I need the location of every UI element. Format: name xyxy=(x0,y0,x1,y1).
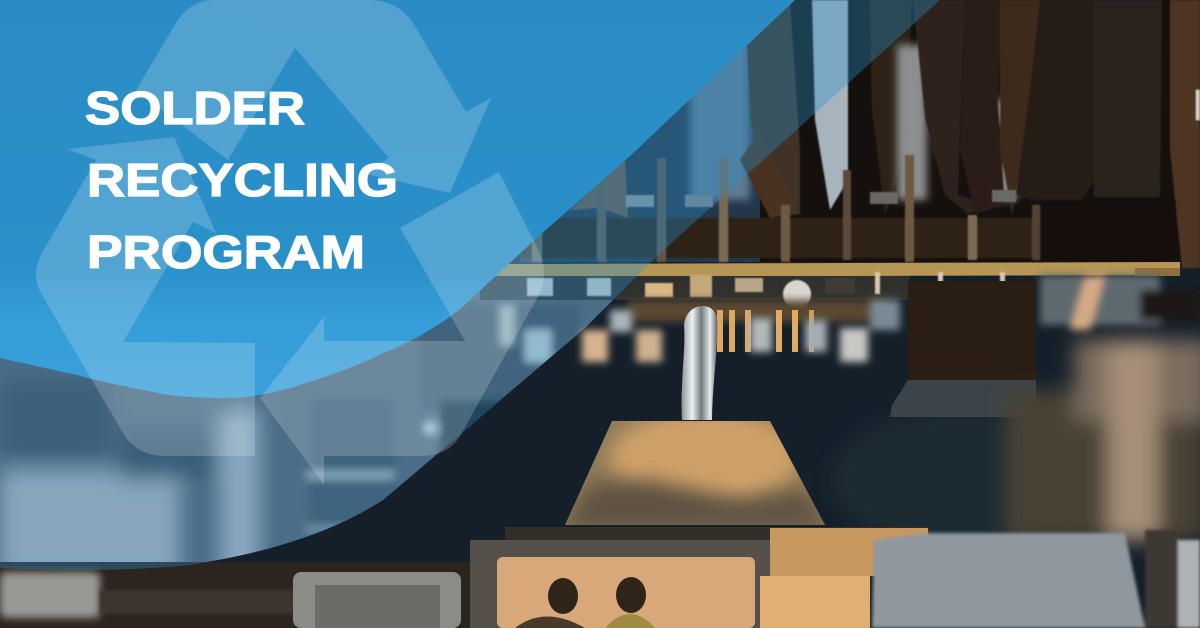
board components xyxy=(527,272,1005,322)
recycle arrow: left xyxy=(36,137,255,456)
title line: RECYCLING: RECYCLING xyxy=(87,154,398,206)
ceramic nozzle cone xyxy=(565,421,825,525)
title line: PROGRAM: PROGRAM xyxy=(87,226,365,278)
dark rail with vertical bars xyxy=(520,130,1175,262)
solder stream xyxy=(682,306,717,420)
left blurred circuitry xyxy=(0,290,613,562)
translucent blue overlay xyxy=(0,0,940,570)
gold pins xyxy=(717,310,814,352)
title xyxy=(85,82,398,278)
recycle arrow: right xyxy=(260,172,544,485)
solder pot base xyxy=(470,527,930,628)
recycle arrow: top xyxy=(136,0,491,193)
foreground right blur xyxy=(1005,340,1200,540)
hanging drapes xyxy=(690,0,1200,268)
icon: recycling symbol xyxy=(36,0,544,485)
title line: SOLDER: SOLDER xyxy=(85,82,305,134)
solid blue curved panel xyxy=(0,0,795,398)
blurred components xyxy=(582,275,1200,362)
bottom left machinery xyxy=(0,562,470,628)
circuit board edge xyxy=(480,262,1180,300)
foreground grey blocks xyxy=(872,530,1200,628)
heat block xyxy=(890,281,1036,417)
